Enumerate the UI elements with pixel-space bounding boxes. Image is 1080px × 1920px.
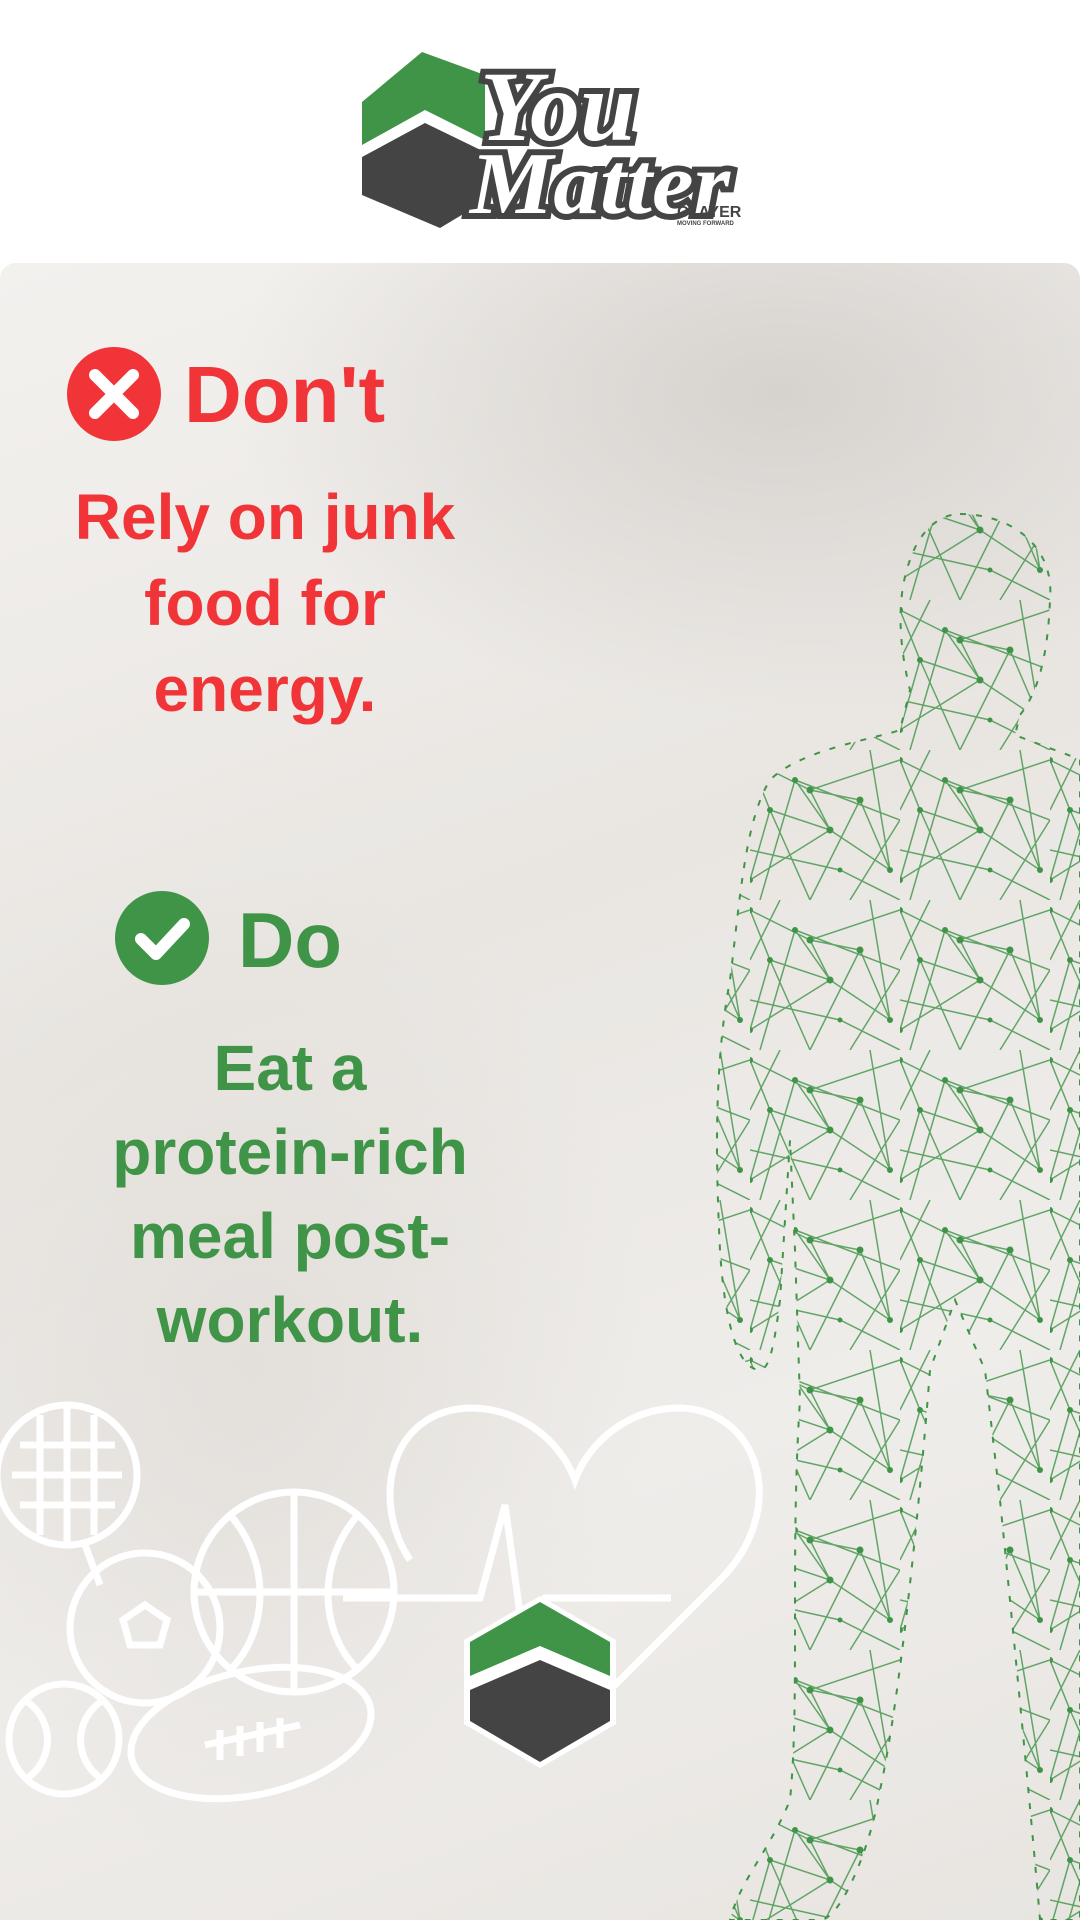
icon: basketball [194, 1492, 394, 1692]
text: do advice: workout. [157, 1284, 423, 1356]
text: don't advice: energy. [154, 653, 376, 725]
logo: You Matter Clayer: CLAYER [677, 204, 742, 221]
icon: red x circle [67, 347, 161, 441]
icon: soccer ball [70, 1553, 220, 1703]
text: do advice: Eat a [214, 1032, 366, 1104]
icon: tennis ball [9, 1684, 119, 1794]
icon: small hexagon logo [464, 1596, 616, 1768]
illustration: network human figure [716, 513, 1080, 1920]
logo: You Matter Clayer: Matter [468, 136, 731, 233]
text: don't advice: food for [144, 567, 386, 639]
text: don't advice: Rely on junk [75, 481, 455, 553]
text: do advice: meal post- [130, 1200, 450, 1272]
heading: Do: Do [238, 896, 342, 984]
text: don't advice [75, 481, 456, 725]
logo: You Matter Clayer [362, 51, 742, 233]
text: do advice: protein-rich [112, 1116, 468, 1188]
logo: You Matter Clayer: You [480, 51, 636, 162]
icon: tennis racket [0, 1405, 137, 1585]
text: do advice [112, 1032, 468, 1356]
icon: heart with pulse line [343, 1408, 759, 1740]
illustration: sports and heart line icons [0, 1402, 763, 1802]
heading: Don't: Don't [184, 350, 385, 439]
logo: You Matter Clayer: MOVING FORWARD [677, 221, 735, 227]
icon: green check circle [115, 891, 209, 985]
icon: american football [119, 1647, 383, 1819]
